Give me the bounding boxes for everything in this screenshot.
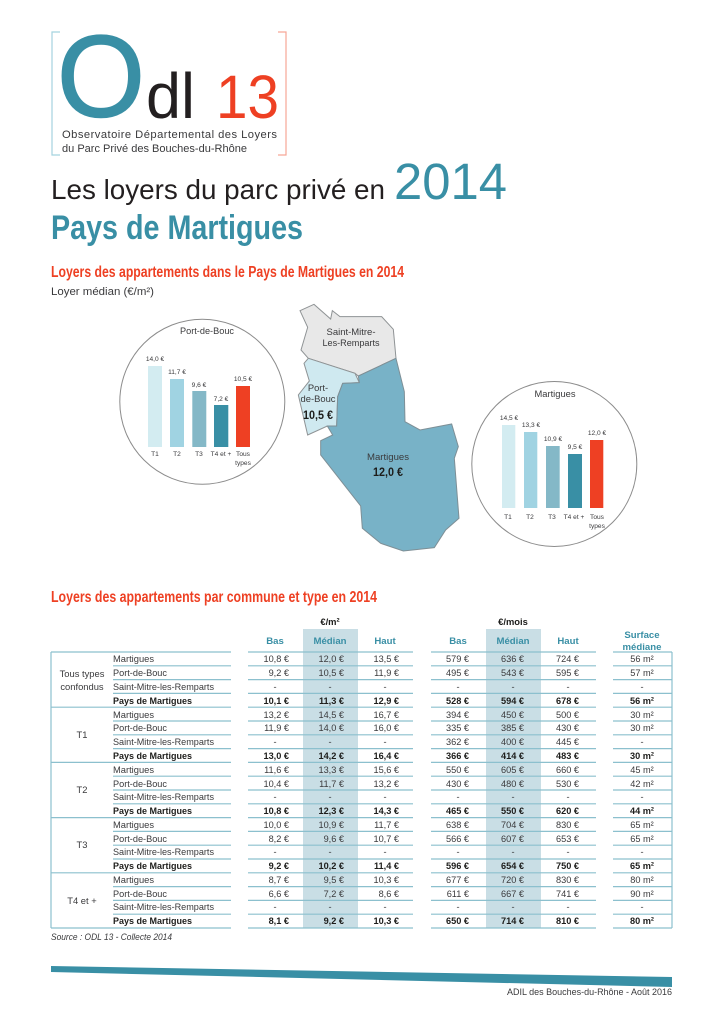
logo: Odl 13: Observatoire Départemental des Loyers <box>62 129 277 141</box>
group: Tous types confondus: 636 € <box>501 654 524 664</box>
group: T2: 480 € <box>501 779 524 789</box>
group: T4 et +: 80 m² <box>630 875 654 885</box>
group: T3: 607 € <box>501 834 524 844</box>
group: T3: 653 € <box>556 834 579 844</box>
row group labels: T1 <box>77 729 87 740</box>
group: T3: Martigues <box>113 820 154 830</box>
group: T3: 8,2 € <box>269 834 289 844</box>
median column highlight <box>303 629 541 928</box>
chart: Port-de-Bouc: Port-de-Bouc <box>180 326 235 336</box>
group: T2: - <box>383 792 387 802</box>
group: T1: 30 m² <box>630 710 654 720</box>
group: T2: 620 € <box>556 806 579 816</box>
map label: Port-: Port- <box>308 382 328 393</box>
table header: €/m² <box>320 616 340 627</box>
map label: Saint-Mitre: Saint-Mitre- <box>326 326 376 337</box>
chart: Port-de-Bouc: T1 <box>151 451 159 458</box>
group: T1: - <box>383 737 387 747</box>
commune: Saint-Mitre-les-Remparts <box>300 304 396 376</box>
table header: médiane <box>623 642 661 653</box>
group: T4 et +: - <box>456 902 460 912</box>
group: T3: 65 m² <box>630 861 654 871</box>
group: T1: 13,2 € <box>263 710 289 720</box>
group: T1: 500 € <box>556 710 579 720</box>
group: T4 et +: 650 € <box>446 916 469 926</box>
group: T3: 10,2 € <box>318 861 344 871</box>
group: T4 et +: 6,6 € <box>269 889 289 899</box>
group: Tous types confondus: 495 € <box>446 668 469 678</box>
chart: Martigues: 9,5 € <box>568 444 583 451</box>
group: T1: 366 € <box>446 751 469 761</box>
group: T3: - <box>566 847 570 857</box>
group: T2: Martigues <box>113 765 154 775</box>
table header: Haut <box>557 636 579 647</box>
map value: Martigues: 12,0 € <box>373 465 403 479</box>
group: T2: 430 € <box>446 779 469 789</box>
group: T2: Saint-Mitre-les-Remparts <box>113 792 214 802</box>
group: T3: 596 € <box>446 861 469 871</box>
group: T3: 566 € <box>446 834 469 844</box>
source note: Source : ODL 13 - Collecte 2014 <box>51 932 172 942</box>
group: T2: 15,6 € <box>373 765 399 775</box>
group: T2 <box>113 765 654 816</box>
group: T4 et +: 9,5 € <box>324 875 344 885</box>
group: Tous types confondus: Port-de-Bouc <box>113 668 167 678</box>
commune: Martigues <box>321 358 459 551</box>
group: T4 et +: 8,1 € <box>269 916 289 926</box>
row group labels <box>60 668 105 906</box>
group: Tous types confondus: 12,9 € <box>373 696 399 706</box>
group: T3: - <box>640 847 644 857</box>
group: T3: - <box>383 847 387 857</box>
group: T3: Port-de-Bouc <box>113 834 167 844</box>
table header: €/mois <box>498 616 528 627</box>
subtitle: Pays de Martigues: Pays de Martigues <box>51 209 303 247</box>
group: T2: 550 € <box>446 765 469 775</box>
table header: Bas <box>266 636 284 647</box>
chart: Martigues: T1 <box>504 514 512 521</box>
group: T2: 42 m² <box>630 779 654 789</box>
group: T1: Martigues <box>113 710 154 720</box>
group: T4 et +: - <box>511 902 515 912</box>
group: T2: 550 € <box>501 806 524 816</box>
group: T4 et +: 830 € <box>556 875 579 885</box>
group: T3: - <box>511 847 515 857</box>
group: T1: 400 € <box>501 737 524 747</box>
chart: Martigues: 12,0 € <box>588 430 606 437</box>
group: T4 et +: - <box>328 902 332 912</box>
footer credit: ADIL des Bouches-du-Rhône - Août 2016 <box>507 987 672 997</box>
logo: Odl 13 <box>52 12 286 155</box>
group: T1: 450 € <box>501 710 524 720</box>
group: T4 et +: 90 m² <box>630 889 654 899</box>
chart: Martigues: 13,3 € <box>522 422 540 429</box>
group: Tous types confondus: - <box>640 682 644 692</box>
chart: Martigues <box>472 382 637 546</box>
group: T2: 45 m² <box>630 765 654 775</box>
chart: Port-de-Bouc: types <box>235 460 252 467</box>
group: Tous types confondus: 56 m² <box>630 654 654 664</box>
group: T3: 750 € <box>556 861 579 871</box>
group: T1: Port-de-Bouc <box>113 723 167 733</box>
group: T1: 16,7 € <box>373 710 399 720</box>
group: T3: 11,4 € <box>374 861 399 871</box>
title: 2014 <box>394 153 507 210</box>
group: Tous types confondus: - <box>383 682 387 692</box>
group: T4 et +: - <box>273 902 277 912</box>
group: T1: Saint-Mitre-les-Remparts <box>113 737 214 747</box>
title <box>51 153 507 210</box>
group: T2: - <box>511 792 515 802</box>
group: Tous types confondus: 11,3 € <box>319 696 344 706</box>
chart: Port-de-Bouc: 9,6 € <box>192 382 207 389</box>
group: T2: - <box>456 792 460 802</box>
group: T4 et +: Martigues <box>113 875 154 885</box>
group: T4 et +: 10,3 € <box>373 875 399 885</box>
group: T4 et +: Saint-Mitre-les-Remparts <box>113 902 214 912</box>
group: T4 et +: 611 € <box>447 889 469 899</box>
group: Tous types confondus: 10,8 € <box>263 654 289 664</box>
group: T1: 11,9 € <box>264 723 289 733</box>
group: Tous types confondus: Pays de Martigues <box>113 696 192 706</box>
group: T4 et +: 677 € <box>446 875 469 885</box>
group: T2: 11,7 € <box>319 779 344 789</box>
group: T2: 12,3 € <box>318 806 344 816</box>
group: T2: - <box>328 792 332 802</box>
group: Tous types confondus: - <box>456 682 460 692</box>
chart: Port-de-Bouc: T2 <box>173 451 181 458</box>
group: Tous types confondus: - <box>328 682 332 692</box>
map caption: Loyer médian (€/m²) <box>51 286 154 298</box>
group: Tous types confondus: 543 € <box>501 668 524 678</box>
row group labels: T2 <box>77 784 87 795</box>
group: T3: 830 € <box>556 820 579 830</box>
group: T1 <box>113 710 654 761</box>
group: Tous types confondus: 11,9 € <box>374 668 399 678</box>
group: T1: - <box>328 737 332 747</box>
logo: Odl 13: O <box>57 12 145 142</box>
chart: Port-de-Bouc: T3 <box>195 451 203 458</box>
map value: Port-de-Bouc: 10,5 € <box>303 408 333 422</box>
heading: map section: Loyers des appartements dans le Pays de Martigues en 2014 <box>51 264 404 281</box>
group: Tous types confondus: 12,0 € <box>318 654 344 664</box>
commune: Port-de-Bouc <box>298 358 359 435</box>
table header: Médian <box>496 636 530 647</box>
chart: Port-de-Bouc: T4 et + <box>211 451 231 458</box>
group: T2: 530 € <box>556 779 579 789</box>
group: Tous types confondus: 57 m² <box>630 668 654 678</box>
map label: Les-Remparts: Les-Remparts <box>322 337 380 348</box>
group: T2: - <box>640 792 644 802</box>
group: T3: 65 m² <box>630 820 654 830</box>
group: T1: 430 € <box>556 723 579 733</box>
logo: Odl 13: 13 <box>216 63 279 131</box>
group: T1: 14,0 € <box>318 723 344 733</box>
group: T1: - <box>640 737 644 747</box>
group: T4 et +: 741 € <box>556 889 579 899</box>
logo: Odl 13: dl <box>146 60 195 132</box>
group: T3: 638 € <box>446 820 469 830</box>
group: Tous types confondus: 595 € <box>556 668 579 678</box>
group: Tous types confondus: 724 € <box>556 654 579 664</box>
group: T1: 14,2 € <box>318 751 344 761</box>
group: Tous types confondus: 594 € <box>501 696 524 706</box>
group: T2: 10,8 € <box>263 806 289 816</box>
group: T2: Pays de Martigues <box>113 806 192 816</box>
table header: Médian <box>313 636 347 647</box>
chart: Port-de-Bouc <box>120 319 285 484</box>
group: T4 et +: 9,2 € <box>324 916 344 926</box>
group: T1: 16,0 € <box>373 723 399 733</box>
group: T3: Pays de Martigues <box>113 861 192 871</box>
group: T4 et +: 720 € <box>501 875 524 885</box>
row group labels: T3 <box>77 839 87 850</box>
group: T4 et +: 714 € <box>501 916 524 926</box>
group: T3 <box>113 820 654 871</box>
group: T2: 13,2 € <box>373 779 399 789</box>
group: T3: 10,7 € <box>373 834 399 844</box>
group: T3: 10,9 € <box>318 820 344 830</box>
group: T3: 65 m² <box>630 834 654 844</box>
group: T3: Saint-Mitre-les-Remparts <box>113 847 214 857</box>
chart: Martigues: T4 et + <box>564 514 584 521</box>
title: Les loyers du parc privé en <box>51 174 385 205</box>
group: T1: 16,4 € <box>373 751 399 761</box>
group: Tous types confondus: 13,5 € <box>373 654 399 664</box>
group: T4 et +: 10,3 € <box>373 916 399 926</box>
group: T2: - <box>566 792 570 802</box>
chart: Port-de-Bouc: 11,7 € <box>168 369 186 376</box>
group: T1: 445 € <box>556 737 579 747</box>
group: T2: - <box>273 792 277 802</box>
table header: Haut <box>374 636 396 647</box>
group: T4 et +: - <box>640 902 644 912</box>
group: T4 et +: 8,6 € <box>379 889 399 899</box>
group: T3: - <box>273 847 277 857</box>
group: T3: 9,6 € <box>324 834 344 844</box>
group: Tous types confondus: 579 € <box>446 654 469 664</box>
group: T1: Pays de Martigues <box>113 751 192 761</box>
row group labels: T4 et + <box>67 895 97 906</box>
chart: Martigues: Martigues <box>534 389 576 399</box>
group: T2: 44 m² <box>630 806 654 816</box>
group: T1: 483 € <box>556 751 579 761</box>
group: T1: 13,0 € <box>263 751 289 761</box>
group: T3: 704 € <box>501 820 524 830</box>
chart: Port-de-Bouc: 14,0 € <box>146 356 164 363</box>
group: T3: 11,7 € <box>374 820 399 830</box>
group: T1: 362 € <box>446 737 469 747</box>
group: T4 et +: 8,7 € <box>269 875 289 885</box>
chart: Martigues: T3 <box>548 514 556 521</box>
group: Tous types confondus: 10,1 € <box>263 696 289 706</box>
group: T2: 13,3 € <box>318 765 344 775</box>
table header: Bas <box>449 636 467 647</box>
chart: Martigues: 14,5 € <box>500 415 518 422</box>
group: T2: 14,3 € <box>373 806 399 816</box>
group: T3: - <box>328 847 332 857</box>
chart: Martigues: 10,9 € <box>544 436 562 443</box>
table header: Surface <box>624 630 660 641</box>
group: T1: 394 € <box>446 710 469 720</box>
group: T4 et +: 667 € <box>501 889 524 899</box>
group: T1: 30 m² <box>630 723 654 733</box>
group: Tous types confondus: 56 m² <box>630 696 654 706</box>
group: Tous types confondus: Martigues <box>113 654 154 664</box>
group: T1: - <box>273 737 277 747</box>
group: T2: 465 € <box>446 806 469 816</box>
chart: Port-de-Bouc: 7,2 € <box>214 396 229 403</box>
group: T3: 9,2 € <box>269 861 289 871</box>
group: T1: 335 € <box>446 723 469 733</box>
group: Tous types confondus: 528 € <box>446 696 469 706</box>
group: T2: 11,6 € <box>264 765 289 775</box>
group: T1: 414 € <box>501 751 524 761</box>
group: Tous types confondus: - <box>273 682 277 692</box>
group: T4 et + <box>113 875 654 926</box>
group: T4 et +: 810 € <box>556 916 579 926</box>
group: Tous types confondus: 9,2 € <box>269 668 289 678</box>
chart: Port-de-Bouc: Tous <box>236 451 251 458</box>
group: T4 et +: 7,2 € <box>324 889 344 899</box>
group: T2: 660 € <box>556 765 579 775</box>
logo: Odl 13: du Parc Privé des Bouches-du-Rhône <box>62 143 247 155</box>
group: Tous types confondus: 10,5 € <box>318 668 344 678</box>
group: T4 et +: Port-de-Bouc <box>113 889 167 899</box>
group: T4 et +: 80 m² <box>630 916 654 926</box>
map of communes <box>298 304 459 551</box>
group: T3: - <box>456 847 460 857</box>
group: T1: 14,5 € <box>318 710 344 720</box>
row group labels: Tous types <box>60 668 105 679</box>
group: T4 et +: - <box>566 902 570 912</box>
chart: Martigues: Tous <box>590 514 605 521</box>
group: T4 et +: - <box>383 902 387 912</box>
heading: table section: Loyers des appartements par commune et type en 2014 <box>51 589 377 606</box>
group: Tous types confondus: - <box>511 682 515 692</box>
group: T3: 10,0 € <box>263 820 289 830</box>
chart: Port-de-Bouc: 10,5 € <box>234 376 252 383</box>
footer band <box>51 966 672 987</box>
table header <box>266 616 661 653</box>
row group labels: confondus <box>60 681 104 692</box>
chart: Martigues: T2 <box>526 514 534 521</box>
group: T2: 605 € <box>501 765 524 775</box>
group: Tous types confondus: 678 € <box>556 696 579 706</box>
group: Tous types confondus: - <box>566 682 570 692</box>
table <box>51 616 672 928</box>
group: T2: 10,4 € <box>263 779 289 789</box>
group: T4 et +: Pays de Martigues <box>113 916 192 926</box>
chart: Martigues: types <box>589 523 606 530</box>
group: T1: 30 m² <box>630 751 654 761</box>
group: Tous types confondus: Saint-Mitre-les-Remparts <box>113 682 214 692</box>
map label: Martigues: Martigues <box>367 451 409 462</box>
group: T2: Port-de-Bouc <box>113 779 167 789</box>
group: T3: 654 € <box>501 861 524 871</box>
group: T1: 385 € <box>501 723 524 733</box>
map label: de-Bouc: de-Bouc <box>300 393 336 404</box>
group: Tous types confondus <box>113 654 654 706</box>
